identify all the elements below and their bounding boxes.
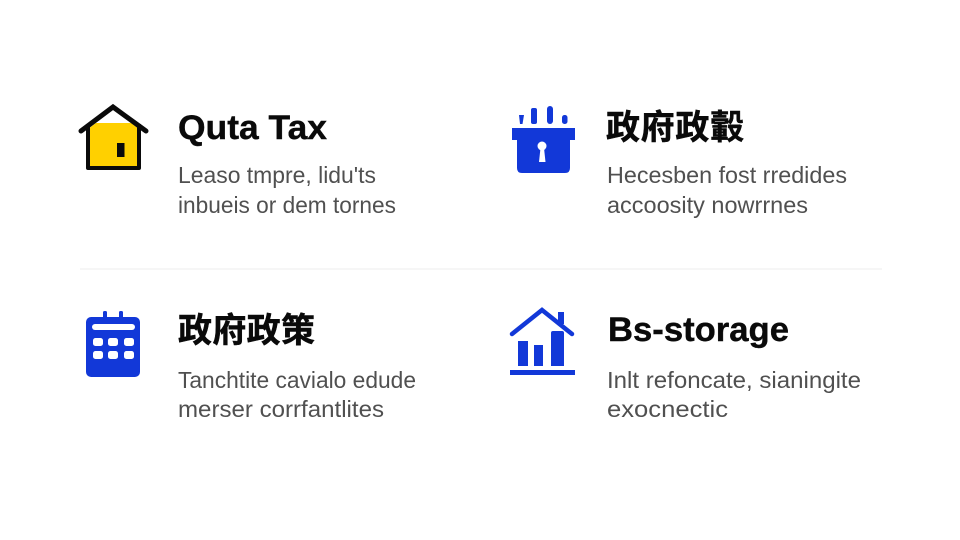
panel: 政府政轂 (512, 106, 847, 218)
text block: description: accoosity nowrrnes (607, 192, 808, 218)
heading: 政府政策: 政府政策 (178, 312, 315, 350)
text block: description: inbueis or dem tornes (178, 192, 396, 218)
panel: 政府政策 (86, 311, 416, 422)
text block: description (607, 162, 847, 218)
icon: blue calendar (86, 311, 140, 377)
text block: description (607, 367, 861, 422)
text block: description: exocnectic (607, 396, 728, 422)
text block: description: Leaso tmpre, lidu'ts (178, 162, 376, 188)
heading: Quta Tax: Quta Tax (178, 109, 327, 147)
icon: house with bar chart (510, 310, 575, 375)
icon: yellow house (81, 107, 146, 168)
text block: description: merser corrfantlites (178, 396, 384, 422)
panel: Quta Tax (81, 107, 396, 218)
heading: Bs-storage: Bs-storage (608, 311, 789, 349)
panel: Bs-storage (510, 310, 861, 422)
text block: description: Inlt refoncate, sianingite (607, 367, 861, 393)
text block: description (178, 162, 396, 218)
heading: 政府政轂: 政府政轂 (606, 109, 744, 147)
icon: blue basket with keyhole (512, 106, 575, 173)
text block: description: Tanchtite cavialo edude (178, 367, 416, 393)
text block: description: Hecesben fost rredides (607, 162, 847, 188)
text block: description (178, 367, 416, 422)
